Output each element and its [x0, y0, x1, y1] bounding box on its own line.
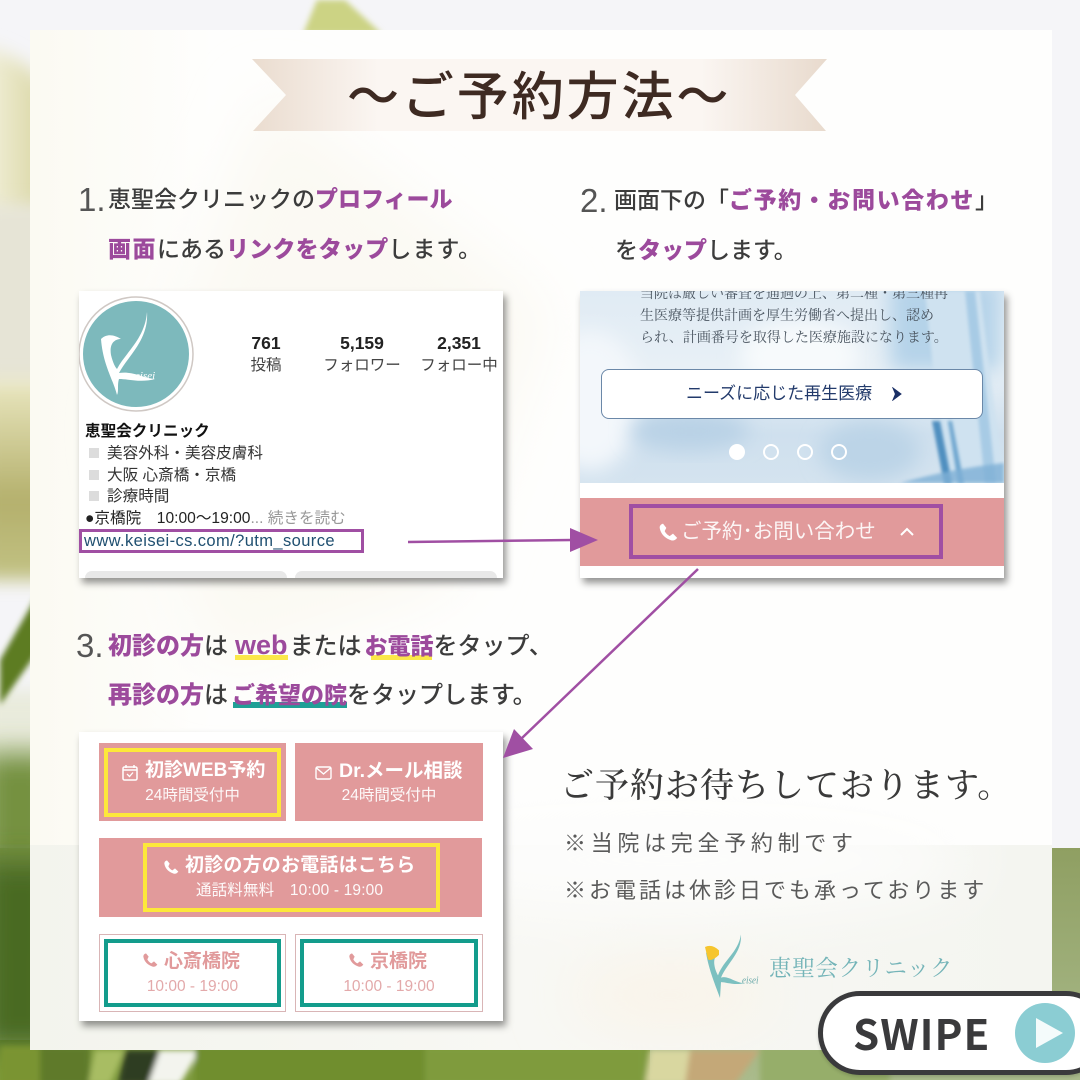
button: shinsaibashi clinic	[99, 934, 286, 1012]
heading: step 2: 画面下の「ご予約・お問い合わせ」	[614, 187, 998, 213]
highlighted contact button	[629, 504, 943, 559]
flower tip	[303, 0, 382, 34]
clinic logo: eisei	[742, 975, 759, 986]
heading: step 1	[78, 181, 482, 262]
underline: phone	[371, 655, 432, 660]
button: first visit web: 初診WEB予約	[145, 760, 265, 781]
arrow: contact bar to booking buttons	[503, 568, 699, 758]
button: doctor mail: 24時間受付中	[342, 787, 436, 804]
note 2: ※お電話は休診日でも承っております	[564, 878, 987, 903]
hero text: られ、計画番号を取得した医療施設になります。	[640, 331, 948, 346]
stats: 761	[251, 333, 281, 353]
heading: step 2	[580, 182, 998, 263]
highlighted contact button: ご予約･お問い合わせ	[681, 520, 876, 543]
stats: 2,351	[437, 333, 481, 353]
icon: play circle	[1015, 1003, 1075, 1063]
button: shinsaibashi clinic: 10:00 - 19:00	[147, 978, 238, 995]
swipe button	[818, 991, 1080, 1075]
title ribbon	[252, 59, 827, 131]
profile bio text	[85, 422, 346, 526]
underline: preferred clinic	[233, 702, 347, 708]
profile bio text: 診療時間	[107, 488, 169, 505]
button: ニーズに応じた再生医療	[686, 384, 872, 403]
button: first visit web	[99, 743, 286, 821]
stats: フォロワー	[323, 357, 401, 374]
panel: instagram profile screenshot	[79, 291, 503, 578]
profile bio text: ●京橋院 10:00〜19:00... 続きを読む	[85, 510, 346, 526]
button: kyobashi clinic: 10:00 - 19:00	[343, 978, 435, 995]
clinic logo	[705, 934, 953, 998]
button: first visit phone: 初診の方のお電話はこちら	[185, 855, 415, 876]
button: kyobashi clinic: 京橋院	[370, 951, 427, 972]
hero text	[640, 291, 948, 346]
button: first visit phone: 通話料無料 10:00 - 19:00	[196, 882, 383, 899]
panel: website screenshot	[580, 291, 1004, 578]
link highlighted: www.keisei-cs.com/?utm_source	[84, 532, 335, 550]
website hero image	[580, 291, 1004, 483]
heading: step 1: 恵聖会クリニックのプロフィール	[108, 186, 453, 212]
heading: step 2: 2.	[580, 182, 608, 219]
button	[601, 369, 983, 419]
pink contact bar	[580, 498, 1004, 566]
message block	[560, 768, 1012, 903]
heading: step 3: 初診の方は webまたはお電話をタップ、	[108, 630, 553, 660]
button: first visit phone	[99, 838, 482, 917]
stats: 5,159	[340, 333, 384, 353]
stats: フォロー中	[420, 357, 498, 374]
clinic name: 恵聖会クリニック	[769, 956, 953, 981]
profile bio text: 美容外科・美容皮膚科	[107, 445, 263, 462]
left strip	[0, 45, 60, 215]
button: kyobashi clinic	[295, 934, 483, 1012]
heading: step 2: をタップします。	[615, 237, 797, 263]
carousel dots	[729, 444, 847, 460]
button: doctor mail: Dr.メール相談	[339, 760, 463, 782]
heading: step 3: 3.	[76, 627, 104, 664]
message heading: ご予約お待ちしております。	[560, 768, 1012, 805]
stats	[250, 333, 498, 374]
button: first visit web: 24時間受付中	[145, 787, 240, 804]
swipe label: SWIPE	[853, 1002, 990, 1063]
bottom strip colours	[0, 1046, 890, 1080]
link highlighted	[79, 529, 364, 553]
stats: 投稿	[250, 357, 282, 374]
profile bio text: 大阪 心斎橋・京橋	[107, 466, 236, 484]
button: doctor mail	[295, 743, 483, 821]
heading: step 3	[76, 627, 553, 709]
green lower band	[0, 848, 1080, 1080]
icon: keisei logo circle	[79, 296, 194, 412]
heading: step 1: 1.	[78, 181, 106, 218]
note 1: ※当院は完全予約制です	[564, 831, 858, 856]
hero text: 生医療等提供計画を厚生労働省へ提出し、認め	[640, 309, 934, 324]
title text: 〜ご予約方法〜	[347, 69, 731, 127]
heading: step 1: 画面にあるリンクをタップします。	[108, 236, 482, 262]
icon: keisei logo circle: eisei	[135, 370, 155, 382]
tabs	[85, 571, 287, 581]
arrow: link to contact bar	[408, 528, 598, 552]
panel: booking buttons screenshot	[79, 732, 503, 1021]
underline: web	[235, 655, 288, 660]
heading: step 3: 再診の方はご希望の院をタップします。	[108, 682, 537, 709]
profile bio text: 恵聖会クリニック	[85, 423, 210, 440]
button: shinsaibashi clinic: 心斎橋院	[164, 951, 240, 972]
